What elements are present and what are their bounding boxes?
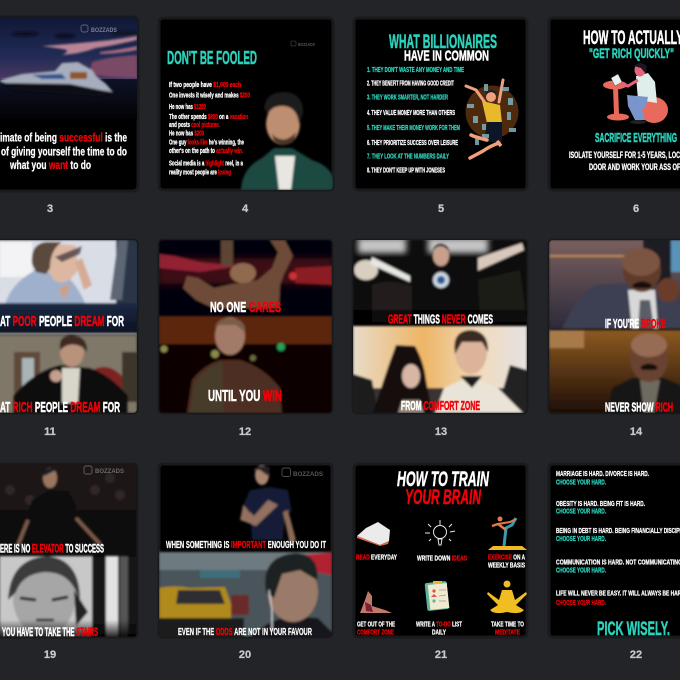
slide 3 quote: imate of being successful is the: [0, 132, 127, 144]
numbered list: 8. THEY DON'T KEEP UP WITH JONESES: [367, 168, 445, 174]
icon labels: WRITE DOWN IDEAS: [417, 554, 467, 562]
captions: [388, 312, 493, 413]
heading: [397, 468, 489, 509]
captions: [208, 299, 282, 405]
icon: meditation figure: [487, 580, 527, 613]
body copy: If two people have $1,000 each: [169, 82, 241, 89]
captions: GREAT THINGS NEVER COMES: [388, 312, 493, 326]
panel: slide 3 yacht: [0, 17, 139, 191]
numbered list: 3. THEY WORK SMARTER, NOT HARDER: [367, 94, 448, 102]
captions: [0, 314, 124, 416]
heading: HAVE IN COMMON: [404, 48, 489, 64]
panel: slide 12 no one cares: [159, 240, 332, 413]
watermark: [84, 466, 125, 475]
captions: FROM COMFORT ZONE: [401, 399, 480, 413]
watermark: BOZZADS: [298, 42, 315, 47]
watermark: BOZZADS: [95, 468, 125, 475]
panel: slide 4 don't be fooled: [159, 18, 333, 190]
icon labels: GET OUT OF THE: [357, 620, 395, 628]
body copy: The other spends $800 on a vacation: [169, 114, 248, 121]
slide 3 quote: what you want to do: [9, 160, 91, 172]
captions: AT POOR PEOPLE DREAM FOR: [0, 314, 124, 330]
icon: yoga balance: [488, 516, 527, 550]
numbered list: 4. THEY VALUE MONEY MORE THAN OTHERS: [367, 110, 455, 117]
captions: [166, 540, 326, 638]
heading: HOW TO TRAIN: [397, 468, 489, 491]
panel: slide 22 choose your hard: [549, 464, 680, 640]
icon labels: WRITE A TO-DO LIST: [416, 620, 462, 628]
photo: host in dark suit: [549, 330, 680, 413]
heading: YOUR BRAIN: [405, 486, 481, 509]
slide numbers: 20: [239, 649, 251, 661]
slide numbers: 3: [47, 203, 53, 215]
body copy: Social media is a highlight reel, in a: [169, 160, 243, 168]
slide numbers: 22: [630, 649, 642, 661]
icon labels: COMFORT ZONE: [357, 628, 394, 636]
photo: man on stage: [0, 464, 137, 556]
watermark: [291, 41, 315, 47]
heading: [389, 32, 497, 64]
photo: man cheering: [353, 238, 527, 325]
body copy: [169, 82, 250, 176]
photo: yacht at dusk: [0, 18, 139, 119]
body copy: One invests it wisely and makes $200: [169, 92, 250, 100]
watermark: [282, 468, 324, 478]
captions: NO ONE CARES: [210, 299, 281, 316]
statements: CHOOSE YOUR HARD.: [556, 506, 606, 516]
icon labels: TAKE TIME TO: [491, 620, 524, 628]
panel: slide 20 important enough: [159, 464, 332, 638]
numbered list: 7. THEY LOOK AT THE NUMBERS DAILY: [367, 154, 449, 160]
statements: CHOOSE YOUR HARD.: [556, 534, 606, 543]
photo: couple at event: [353, 326, 527, 413]
icon labels: EXERCISE ON A: [488, 552, 525, 562]
panel: slide 14 if you're broke: [549, 240, 680, 414]
captions: AT RICH PEOPLE DREAM FOR: [0, 400, 120, 416]
photo: man hand on chest: [240, 465, 296, 545]
icon labels: DAILY: [432, 628, 446, 636]
heading: [583, 28, 680, 61]
panel: slide 19 elevator to success: [0, 464, 137, 639]
captions: YOU HAVE TO TAKE THE STAIRS: [2, 627, 98, 639]
icon labels: MEDITATE: [495, 628, 520, 636]
photo: wrestler with belt: [159, 316, 332, 413]
watermark: [81, 25, 117, 34]
slide 3 quote: of giving yourself the time to do: [1, 146, 127, 158]
illustration: person at laptop: [603, 63, 668, 124]
photo: man on street with taxi: [159, 552, 332, 637]
slide 3 quote: [0, 132, 127, 172]
statements: CHOOSE YOUR HARD.: [556, 598, 606, 607]
photo: woman at desk: [0, 240, 138, 335]
body copy: and posts cool pictures.: [169, 122, 220, 129]
photo: black and white portrait: [0, 556, 137, 637]
body copy: He now has $200: [169, 130, 204, 138]
icon: open book: [357, 522, 390, 546]
slide numbers: 6: [633, 203, 639, 215]
slide numbers: 4: [242, 203, 249, 215]
captions: WHEN SOMETHING IS IMPORTANT ENOUGH YOU DO IT: [166, 540, 326, 551]
slide numbers: 13: [435, 426, 447, 438]
icon: clipboard checklist: [425, 581, 449, 611]
captions: [605, 317, 673, 414]
numbered list: 6. THEY PRIORITIZE SUCCESS OVER LEISURE: [367, 140, 458, 147]
body copy: other's on the path to actually win.: [169, 148, 243, 155]
photo: man in tuxedo: [0, 335, 138, 413]
photo: host touching ear: [549, 240, 680, 329]
slide numbers: 12: [239, 426, 251, 438]
statements: CHOOSE YOUR HARD.: [556, 566, 606, 574]
statements: [556, 469, 680, 607]
numbered list: 1. THEY DON'T WASTE ANY MONEY AND TIME: [367, 67, 464, 74]
body copy: reality most people are losing: [169, 170, 231, 176]
slide numbers: 14: [630, 426, 643, 438]
slide numbers: 5: [438, 203, 444, 215]
captions: UNTIL YOU WIN: [208, 388, 282, 405]
body copy: He now has $1200: [169, 104, 206, 111]
captions: [0, 544, 104, 639]
numbered list: 5. THEY MAKE THEIR MONEY WORK FOR THEM: [367, 125, 460, 132]
icon: cobra stretch: [360, 591, 392, 613]
icon labels: READ EVERYDAY: [356, 552, 397, 562]
icon labels: [356, 552, 525, 636]
body copy: One guy looks like he's winning, the: [169, 140, 244, 146]
icon: light bulb: [425, 520, 455, 545]
icon labels: WEEKLY BASIS: [488, 560, 525, 570]
numbered list: 2. THEY BENEFIT FROM HAVING GOOD CREDIT: [367, 80, 454, 88]
slide numbers: [44, 203, 643, 661]
panel: slide 13 great things: [353, 238, 527, 413]
panel: slide 5 what billionaires have in common: [354, 18, 527, 190]
heading: DON'T BE FOOLED: [167, 47, 257, 68]
watermark: BOZZADS: [91, 28, 117, 34]
numbered list: [367, 67, 464, 174]
photo: man in green jacket: [241, 92, 333, 190]
statements: CHOOSE YOUR HARD.: [556, 478, 606, 486]
illustration: jumping woman with money: [466, 80, 518, 158]
watermark: BOZZADS: [293, 471, 324, 478]
callout text: [569, 130, 680, 172]
slide numbers: 11: [44, 426, 56, 438]
captions: ERE IS NO ELEVATOR TO SUCCESS: [0, 544, 104, 556]
slide numbers: 21: [435, 649, 447, 661]
photo: wrestler with arm raised: [159, 240, 332, 316]
slide numbers: 19: [44, 649, 56, 661]
panel: slide 21 how to train your brain: [354, 464, 527, 637]
panel: slide 6 how to actually get rich quickly: [549, 18, 680, 190]
captions: EVEN IF THE ODDS ARE NOT IN YOUR FAVOUR: [178, 627, 312, 638]
heading: WHAT BILLIONAIRES: [389, 32, 497, 53]
panel: slide 11 poor vs rich dream: [0, 240, 138, 416]
